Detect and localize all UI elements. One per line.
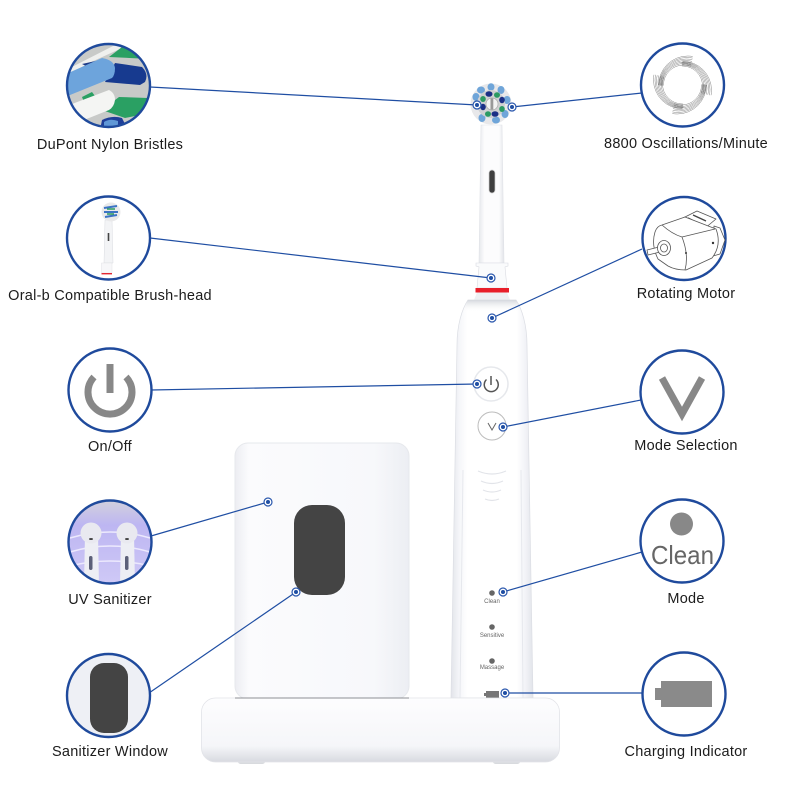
neck slot — [489, 170, 495, 193]
label: Sanitizer Window: Sanitizer Window — [52, 744, 168, 760]
icon: rotating motor — [642, 197, 726, 280]
icon: clean mode: Clean — [651, 540, 714, 570]
collar — [476, 263, 508, 288]
connector lines — [149, 87, 642, 693]
icon: on/off — [68, 348, 152, 432]
label: oscillations: 8800 Oscillations/Minute — [604, 136, 768, 152]
label: Mode: Mode — [667, 591, 705, 607]
charging indicator on handle — [484, 691, 499, 698]
icon: oscillations swirl — [641, 44, 724, 126]
brush head — [470, 83, 512, 124]
charging base — [202, 698, 560, 764]
icon: sanitizer window — [66, 654, 152, 738]
callout dots — [264, 101, 516, 697]
sanitizer window — [294, 505, 345, 595]
mode indicators: Massage — [480, 665, 505, 671]
grip ridges — [478, 471, 506, 500]
power button — [474, 367, 508, 401]
icon: clean mode — [640, 500, 724, 582]
label: On/Off: On/Off — [88, 439, 133, 455]
label: Charging Indicator: Charging Indicator — [624, 744, 748, 760]
mode indicators: Sensitive — [480, 633, 505, 639]
icon: brush head — [67, 196, 150, 280]
sanitizer box — [235, 443, 409, 699]
mode indicators: Clean — [484, 599, 500, 605]
red ring — [476, 288, 509, 292]
icon: nylon bristles — [66, 44, 151, 130]
icon: UV sanitizer — [68, 500, 152, 584]
icon: mode selection — [640, 350, 724, 434]
label: Rotating Motor: Rotating Motor — [637, 286, 735, 302]
brush neck — [479, 125, 504, 263]
mode button — [478, 412, 506, 440]
icon: charging indicator — [642, 652, 726, 736]
label: Mode Selection: Mode Selection — [634, 438, 738, 454]
label: brush-head: Oral-b Compatible Brush-head — [8, 288, 212, 304]
label: UV Sanitizer: UV Sanitizer — [68, 592, 152, 608]
mode indicators — [480, 590, 505, 671]
toothbrush — [451, 83, 533, 698]
label: DuPont Nylon Bristles: DuPont Nylon Bristles — [37, 137, 183, 153]
handle — [451, 300, 533, 698]
